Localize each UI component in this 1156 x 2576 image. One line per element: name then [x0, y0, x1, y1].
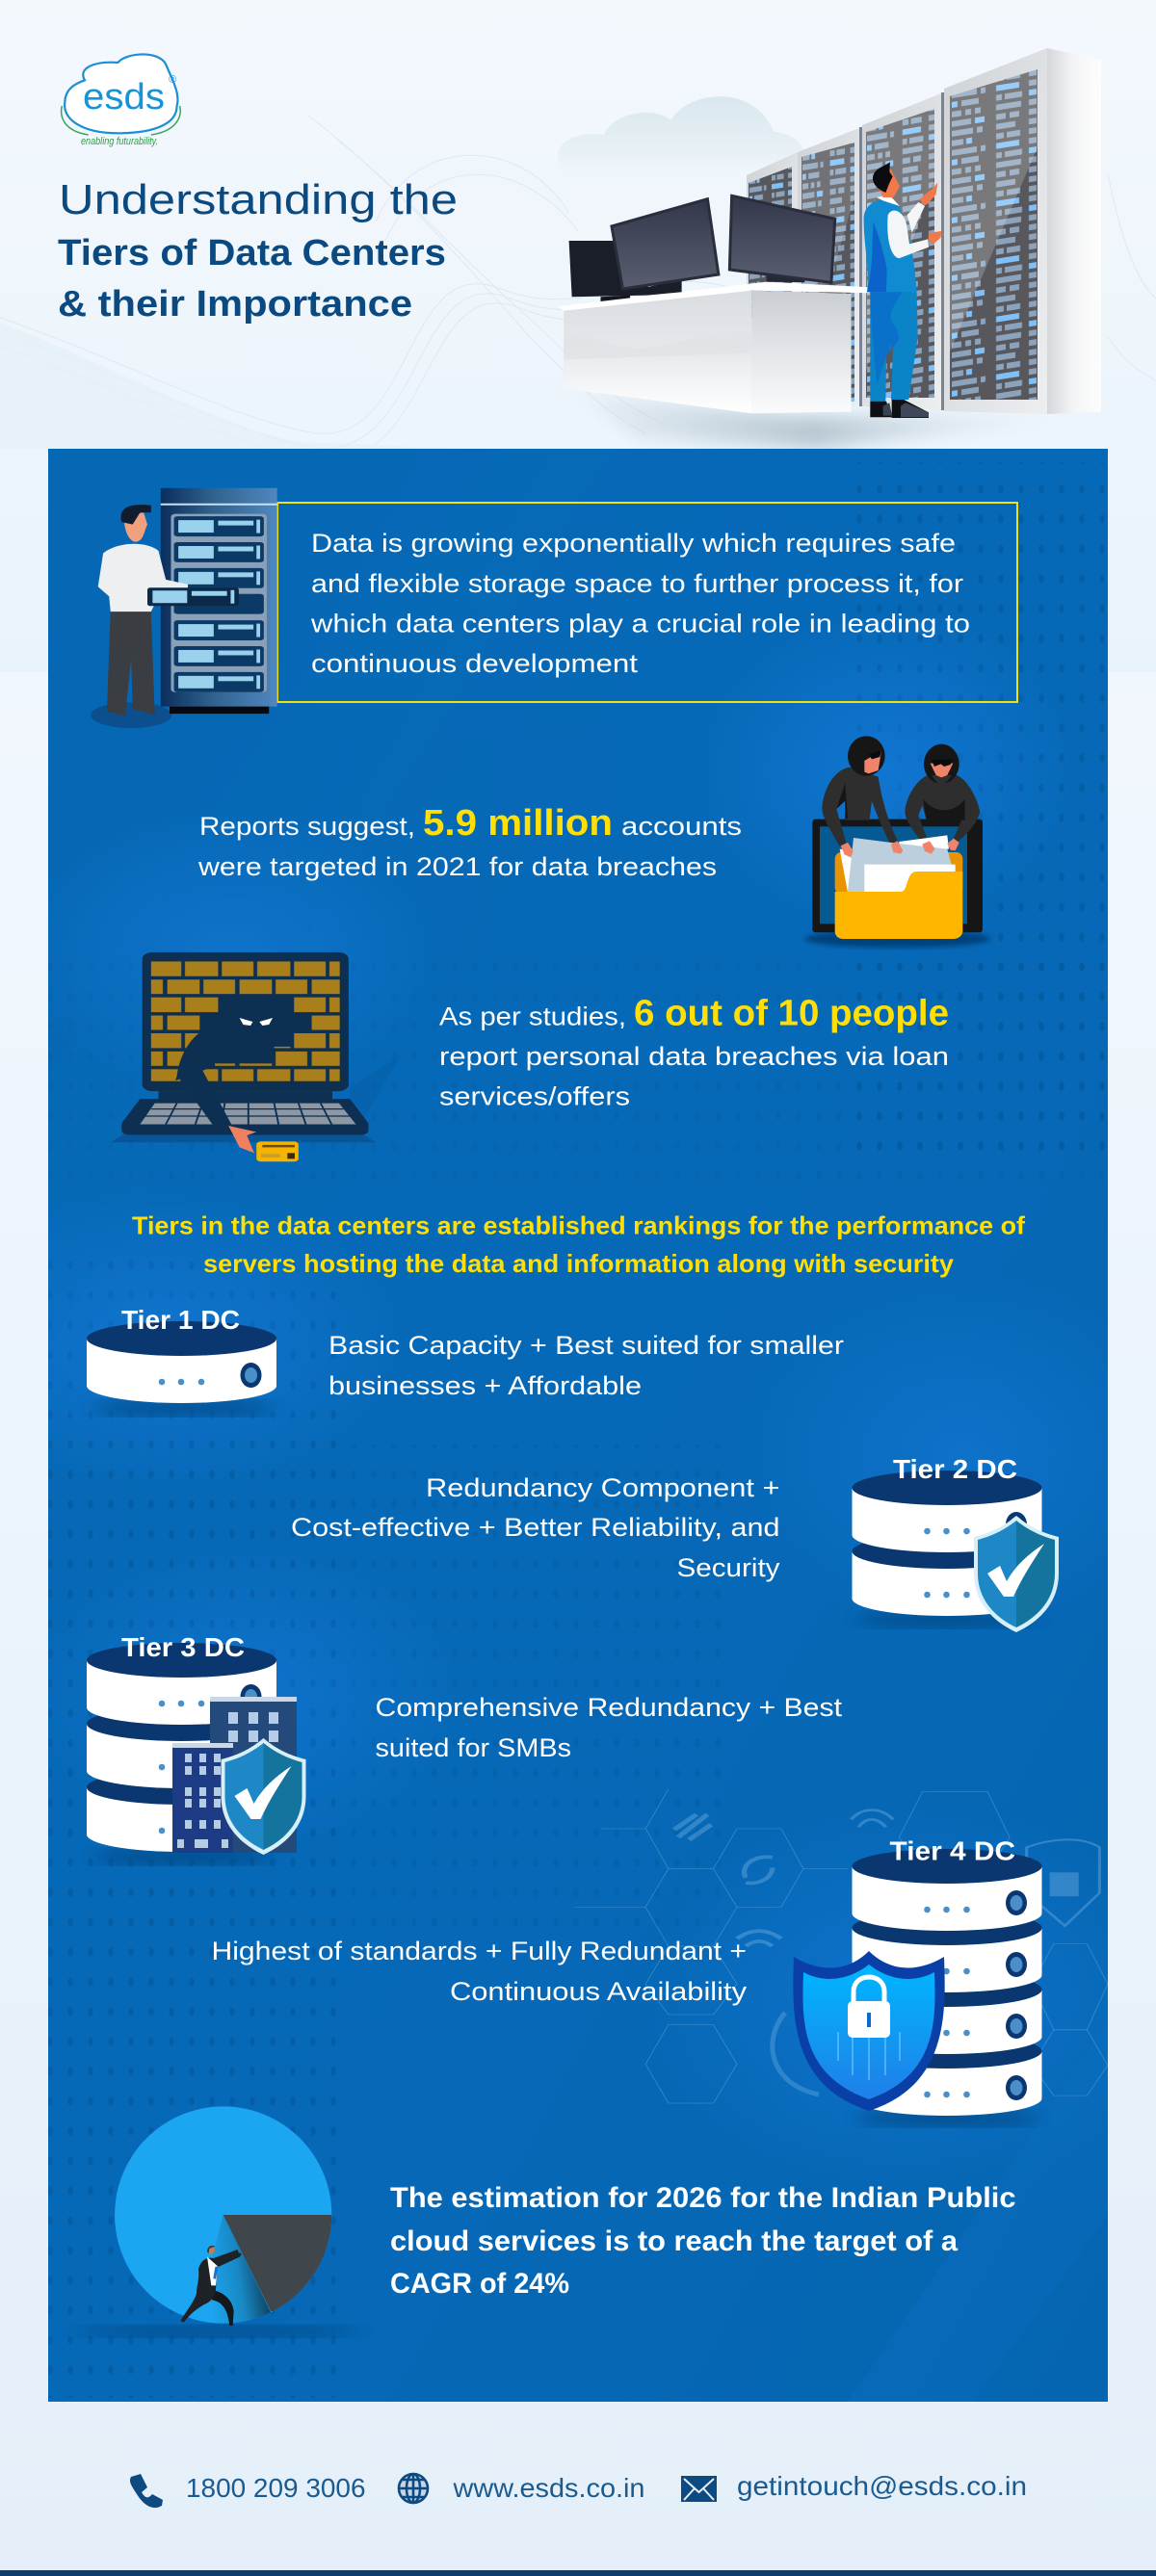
stat: six out of ten people: 6 out of 10 people	[634, 994, 949, 1034]
title	[58, 176, 458, 325]
tier 2 text	[291, 1473, 780, 1582]
title: & their Importance	[58, 284, 412, 325]
heading: tiers explanation	[132, 1211, 1025, 1278]
header illustration: server room	[558, 48, 1101, 449]
intro text: and flexible storage space to further process it, for	[311, 569, 963, 598]
tier 4 text: Highest of standards + Fully Redundant +	[212, 1937, 747, 1965]
stat: data breach accounts: were targeted in 2021 for data breaches	[197, 852, 717, 881]
pie chart with businessman	[72, 2106, 361, 2337]
title: Understanding the	[59, 176, 458, 223]
panel: intro box	[277, 503, 1017, 702]
security rings	[773, 2013, 819, 2095]
tier 2 shield	[974, 1516, 1059, 1632]
tier 3 text: Comprehensive Redundancy + Best	[376, 1693, 843, 1722]
tier 1 text: Basic Capacity + Best suited for smaller	[328, 1331, 844, 1360]
businessman pushing	[180, 2246, 242, 2326]
tier 4 text	[212, 1937, 748, 2006]
header decorative waves	[0, 116, 1156, 460]
tier 2 text: Redundancy Component +	[426, 1473, 780, 1502]
server racks	[747, 48, 1101, 414]
heading: tiers explanation: Tiers in the data centers are established rankings for the performance of	[132, 1211, 1025, 1240]
tier 2 text: Cost-effective + Better Reliability, and	[291, 1513, 780, 1542]
stat: six out of ten people	[439, 994, 949, 1111]
tier 4 text: Continuous Availability	[450, 1977, 748, 2006]
title: Tiers of Data Centers	[58, 233, 446, 273]
tier 3 label: Tier 3 DC	[121, 1632, 245, 1662]
tier 1 icon	[87, 1305, 276, 1416]
tier 1 text	[328, 1331, 844, 1400]
tier 1 text: businesses + Affordable	[328, 1371, 642, 1400]
stat: six out of ten people: report personal data breaches via loan	[439, 1042, 949, 1071]
stat: data breach accounts: 5.9 million	[423, 803, 613, 844]
stat: data breach accounts: accounts	[621, 812, 742, 841]
intro text: Data is growing exponentially which requires safe	[311, 529, 956, 558]
tier 3 icon	[87, 1632, 306, 1864]
closing statement: The estimation for 2026 for the Indian Public	[390, 2182, 1015, 2214]
logo: ®	[169, 74, 176, 86]
stat: data breach accounts: Reports suggest,	[199, 812, 415, 841]
buildings	[172, 1697, 297, 1853]
tier 2 label: Tier 2 DC	[893, 1454, 1017, 1484]
footer contact: phone	[130, 2473, 366, 2508]
heading: tiers explanation: servers hosting the data and information along with security	[203, 1249, 955, 1278]
tier 4 label: Tier 4 DC	[890, 1835, 1015, 1866]
closing statement: CAGR of 24%	[390, 2268, 569, 2300]
logo	[62, 54, 180, 147]
footer contact: website: www.esds.co.in	[452, 2473, 645, 2503]
cloud	[558, 96, 803, 180]
tier 2 icon	[852, 1454, 1059, 1632]
stat: six out of ten people: services/offers	[439, 1082, 630, 1111]
intro text	[310, 529, 970, 678]
tier 3 text: suited for SMBs	[376, 1733, 571, 1762]
lock shield	[793, 1951, 945, 2111]
intro text: which data centers play a crucial role in leading to	[310, 609, 970, 637]
footer contact: phone: 1800 209 3006	[186, 2473, 366, 2503]
logo: enabling futurability.	[81, 136, 158, 147]
tier 2 text: Security	[676, 1553, 780, 1582]
callout border	[277, 503, 1017, 702]
desk and monitors	[558, 195, 870, 413]
tier 1 label: Tier 1 DC	[121, 1305, 240, 1335]
hexagon network decoration	[575, 1789, 1108, 2103]
main blue panel background	[0, 449, 1156, 2402]
person	[864, 162, 941, 418]
stat: data breach accounts	[197, 803, 742, 881]
floor shadow	[578, 395, 1050, 449]
tier 3 shield	[222, 1738, 306, 1855]
intro text: continuous development	[311, 649, 639, 678]
header wave shape	[0, 323, 501, 449]
logo: esds	[83, 77, 165, 117]
tier 3 text	[376, 1693, 843, 1762]
icon: hacker breaking through laptop	[111, 952, 402, 1161]
tier 4 icon	[773, 1835, 1042, 2126]
closing statement: cloud services is to reach the target of a	[390, 2225, 958, 2257]
closing statement	[390, 2182, 1015, 2300]
stat: six out of ten people: As per studies,	[439, 1002, 626, 1030]
icon: technician with server rack	[91, 488, 277, 728]
footer contact: email: getintouch@esds.co.in	[737, 2471, 1027, 2501]
icon: hackers with folder	[804, 736, 990, 948]
